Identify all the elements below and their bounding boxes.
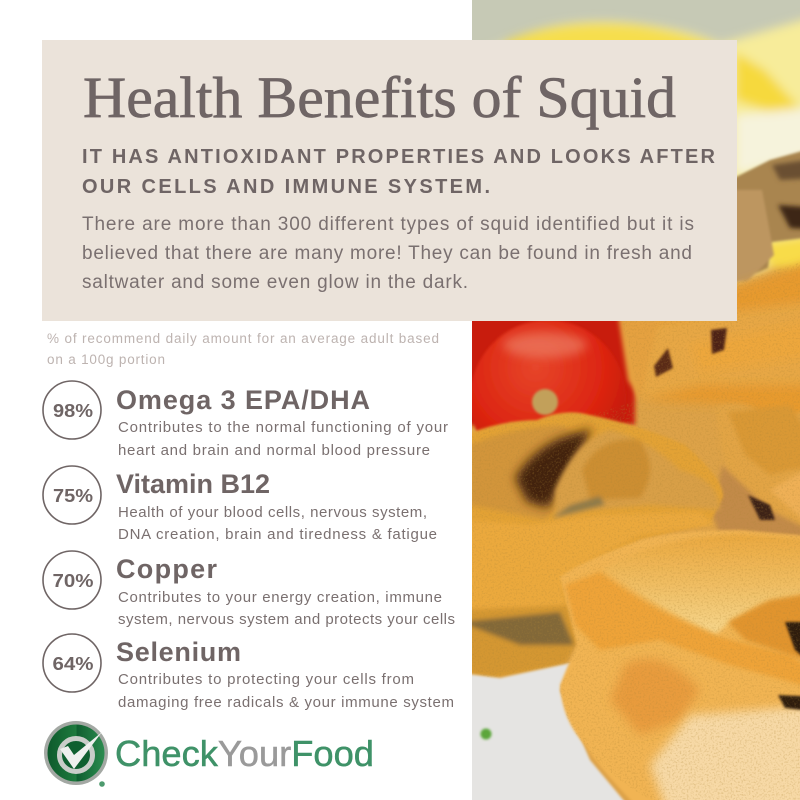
photo: right ring	[713, 406, 800, 536]
footnote	[47, 331, 439, 367]
photo: burnt centre of middle ring	[515, 428, 592, 508]
title: Health Benefits of Squid	[83, 65, 676, 130]
photo: lemon	[500, 16, 800, 284]
photo: tomato	[472, 321, 640, 432]
photo: orange crumb band	[565, 572, 800, 690]
photo: fried squid rings on a plate	[460, 0, 800, 800]
subheading	[82, 146, 716, 198]
photo: front ring	[560, 530, 800, 800]
photo: crumb texture	[472, 262, 800, 800]
heading: vitamin b12: Vitamin B12	[116, 469, 270, 499]
subheading: OUR CELLS AND IMMUNE SYSTEM.	[82, 176, 490, 198]
photo: plate	[472, 662, 626, 800]
description: vitamin b12: DNA creation, brain and tiredness & fatigue	[118, 526, 437, 543]
photo: orange patch	[610, 659, 700, 735]
percent badge: 98%	[43, 381, 101, 439]
icon: green check badge	[44, 721, 108, 787]
description: selenium: Contributes to protecting your cells from	[118, 671, 414, 688]
photo background: grey-green top	[472, 0, 800, 46]
nutrient: selenium	[43, 634, 454, 711]
percent badge: 75%	[43, 466, 101, 524]
photo: pale lower right of front ring	[650, 705, 800, 800]
photo: tentacle shadows	[772, 158, 800, 230]
description: omega 3: heart and brain and normal blood pressure	[118, 442, 430, 459]
header panel	[42, 40, 737, 321]
description: omega 3	[118, 419, 448, 459]
photo: parsley speck	[480, 728, 492, 740]
percent badge: 70%: 70%	[52, 571, 94, 591]
description: copper	[118, 589, 455, 628]
photo: crumb fold	[552, 430, 720, 520]
wordmark: CheckYourFood	[115, 733, 374, 774]
nutrient: vitamin b12	[43, 466, 437, 543]
percent badge: 64%	[43, 634, 101, 692]
nutrient: copper	[43, 551, 455, 628]
photo: grill marks top	[654, 328, 727, 377]
photo: upper right ring	[644, 260, 800, 414]
description: vitamin b12	[118, 504, 437, 543]
intro paragraph	[82, 214, 694, 293]
description: selenium: damaging free radicals & your immune system	[118, 694, 454, 711]
photo: inner side of middle ring	[472, 425, 572, 519]
subheading: IT HAS ANTIOXIDANT PROPERTIES AND LOOKS AFTER	[82, 146, 716, 168]
heading: selenium: Selenium	[116, 637, 241, 667]
logo: CheckYourFood	[44, 721, 374, 787]
description: vitamin b12: Health of your blood cells, nervous system,	[118, 504, 427, 521]
description: selenium	[118, 671, 454, 711]
heading: copper: Copper	[116, 554, 217, 584]
description: copper: system, nervous system and protects your cells	[118, 611, 455, 628]
photo: right ring dark mark	[748, 495, 775, 520]
intro paragraph: believed that there are many more! They can be found in fresh and	[82, 243, 692, 264]
footnote: on a 100g portion	[47, 352, 165, 367]
heading: omega 3: Omega 3 EPA/DHA	[116, 385, 370, 415]
percent badge: 70%	[43, 551, 101, 609]
photo: dark marks on front ring	[778, 622, 800, 712]
description: copper: Contributes to your energy creation, immune	[118, 589, 442, 606]
intro paragraph: saltwater and some even glow in the dark.	[82, 272, 468, 293]
photo: tentacle piece	[737, 150, 800, 283]
intro paragraph: There are more than 300 different types of squid identified but it is	[82, 214, 694, 235]
photo: front ring opening	[603, 534, 800, 634]
percent badge: 75%: 75%	[53, 486, 93, 506]
nutrient: omega 3	[43, 381, 448, 459]
photo: lower band of middle ring	[472, 516, 710, 676]
photo: back crust right	[728, 592, 800, 665]
percent badge: 64%: 64%	[52, 654, 94, 674]
photo: middle ring	[472, 410, 724, 551]
footnote: % of recommend daily amount for an average adult based	[47, 331, 439, 346]
percent badge: 98%: 98%	[53, 401, 93, 421]
description: omega 3: Contributes to the normal functioning of your	[118, 419, 448, 436]
